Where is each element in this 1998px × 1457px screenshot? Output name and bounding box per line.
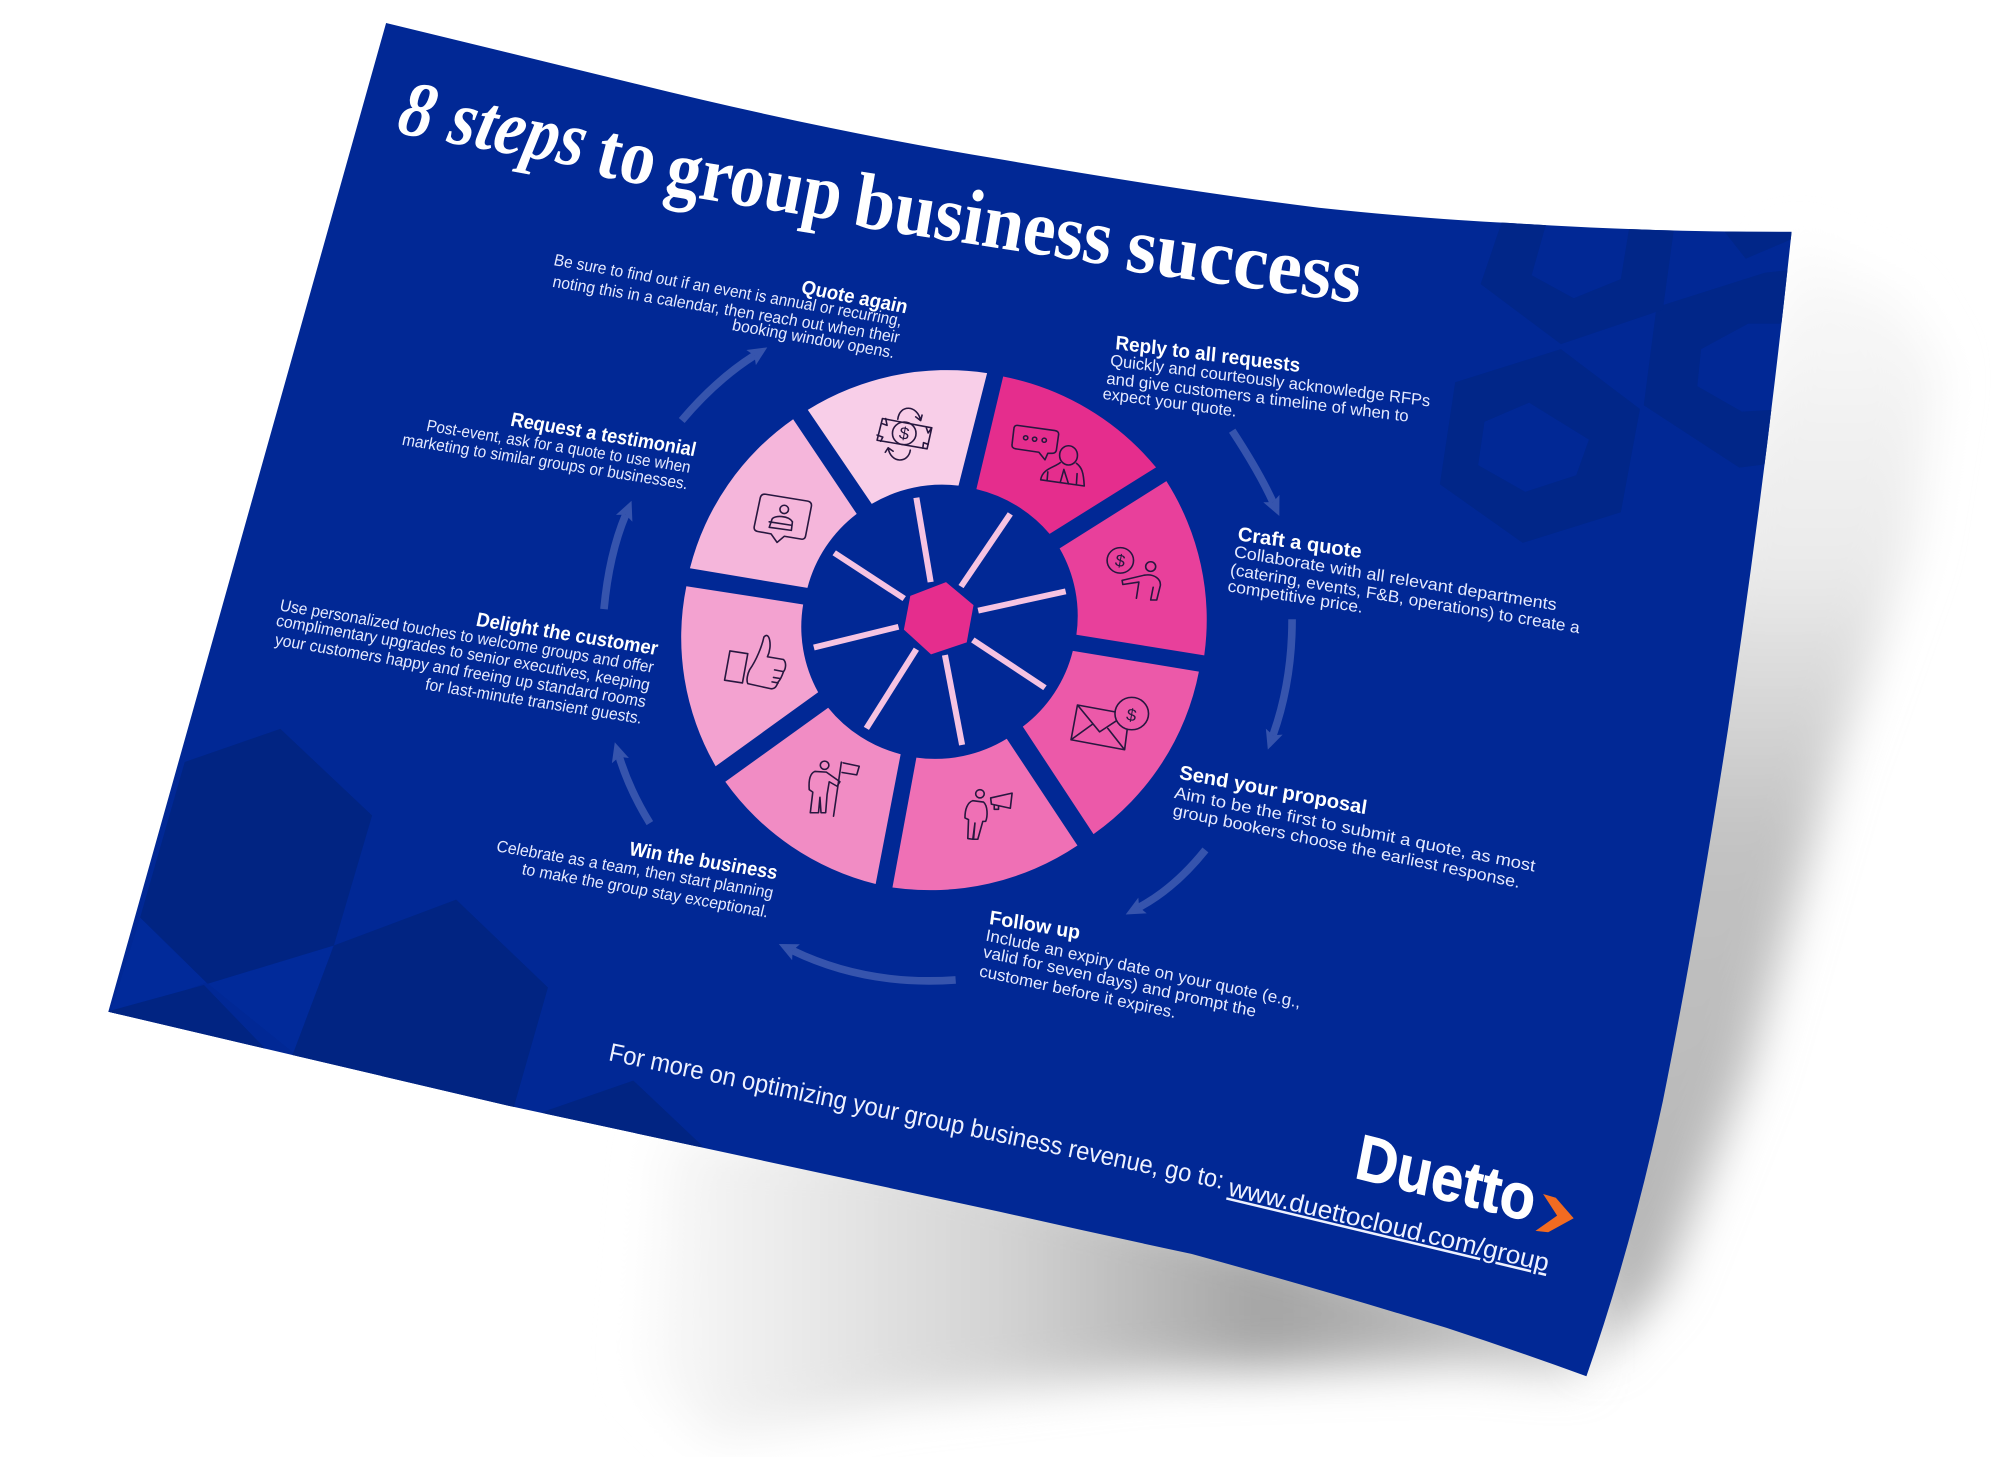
step text: win the business: to make the group stay exceptional.	[520, 860, 770, 921]
step text: win the business: Celebrate as a team, then start planning	[495, 837, 775, 902]
arrow: follow up to win	[793, 951, 956, 981]
spokes	[814, 498, 1066, 745]
step text: delight the customer	[273, 596, 660, 728]
step text: delight the customer: Use personalized touches to welcome groups and offer	[278, 596, 656, 677]
center hexagon	[904, 582, 974, 654]
arrow: testimonial to quote again	[682, 356, 754, 421]
icon: banknote with arrows	[877, 408, 932, 460]
paper shadow	[643, 242, 1939, 1440]
step text: craft a quote: competitive price.	[1227, 576, 1364, 617]
segment: reply to all requests	[976, 377, 1156, 534]
footer text: For more on optimizing your group business revenue, go to:	[607, 1039, 1227, 1195]
step text: craft a quote	[1227, 523, 1582, 637]
step text: reply to all requests: expect your quote.	[1102, 384, 1238, 421]
step text: reply to all requests: Reply to all requests	[1115, 332, 1301, 377]
step text: follow up: Follow up	[988, 907, 1082, 944]
step text: delight the customer: your customers happy and freeing up standard rooms	[273, 630, 648, 711]
title	[391, 65, 1368, 321]
icon: banknote with arrows: $	[898, 423, 911, 444]
step text: quote again: Be sure to find out if an event is annual or recurring,	[552, 250, 904, 330]
step text: quote again: noting this in a calendar, then reach out when their	[551, 272, 902, 347]
step text: follow up	[978, 907, 1302, 1022]
icon: profile speech bubble	[754, 494, 811, 542]
segment: quote again	[808, 370, 987, 504]
icon: coin and presenter	[1107, 548, 1160, 600]
icon: person with megaphone	[965, 790, 1012, 839]
step text: quote again: booking window opens.	[731, 315, 897, 362]
segment: craft a quote	[1060, 481, 1207, 655]
segment: follow up	[892, 739, 1077, 890]
step wheel	[681, 370, 1207, 890]
step text: send your proposal: group bookers choose the earliest response.	[1172, 801, 1522, 892]
arrow: send to follow up	[1139, 850, 1205, 907]
step text: delight the customer: complimentary upgrades to senior executives, keeping	[274, 611, 652, 695]
step text: request a testimonial	[401, 409, 698, 493]
icon: thumbs up	[725, 635, 786, 689]
segment: delight the customer	[681, 586, 818, 766]
step text: delight the customer: for last-minute transient guests.	[423, 675, 644, 728]
icon: speech bubble and person	[1012, 425, 1084, 486]
logo: Duetto: Duetto	[1351, 1120, 1542, 1236]
step text: follow up: Include an expiry date on your quote (e.g.,	[984, 926, 1302, 1012]
title: success	[1121, 202, 1368, 321]
background hexagon pattern	[102, 217, 1809, 1147]
icon: person with flag	[809, 761, 859, 816]
step text: reply to all requests	[1102, 332, 1431, 426]
step text: request a testimonial: Request a testimonial	[509, 409, 698, 461]
title: group	[659, 125, 851, 238]
arrow: delight to request	[604, 515, 626, 609]
step text: send your proposal: Send your proposal	[1178, 762, 1369, 819]
step text: quote again: Quote again	[799, 277, 910, 318]
step text: request a testimonial: marketing to similar groups or businesses.	[401, 430, 690, 493]
paper background	[108, 23, 1792, 1376]
title: 8 steps	[391, 65, 597, 184]
step text: follow up: valid for seven days) and prompt the	[982, 942, 1258, 1021]
step text: follow up: customer before it expires.	[978, 961, 1177, 1022]
segment: win the business	[725, 708, 901, 884]
footer link: www.duettocloud.com/group	[1225, 1174, 1552, 1277]
arrow: reply to craft	[1232, 431, 1273, 502]
arrow: win to delight	[619, 757, 650, 823]
step text: craft a quote: Collaborate with all relevant departments	[1233, 542, 1558, 614]
step text: request a testimonial: Post-event, ask for a quote to use when	[425, 416, 692, 477]
step text: win the business: Win the business	[627, 838, 780, 884]
step text: delight the customer: Delight the customer	[474, 609, 660, 660]
segment: send your proposal	[1023, 651, 1199, 834]
title: business	[848, 158, 1120, 283]
title: to	[588, 108, 667, 204]
step text: reply to all requests: and give customers a timeline of when to	[1106, 369, 1410, 426]
icon: envelope with coin: $	[1125, 704, 1138, 725]
step text: send your proposal: Aim to be the first to submit a quote, as most	[1173, 783, 1537, 876]
step text: craft a quote: Craft a quote	[1237, 523, 1363, 563]
step text: send your proposal	[1172, 762, 1537, 892]
icon: coin and presenter: $	[1114, 550, 1127, 571]
step text: reply to all requests: Quickly and courteously acknowledge RFPs	[1109, 351, 1431, 411]
icon: envelope with coin	[1071, 697, 1149, 750]
segment: request a testimonial	[690, 419, 857, 588]
step text: craft a quote: (catering, events, F&B, operations) to create a	[1229, 560, 1582, 637]
arrow: craft to send	[1273, 619, 1292, 735]
